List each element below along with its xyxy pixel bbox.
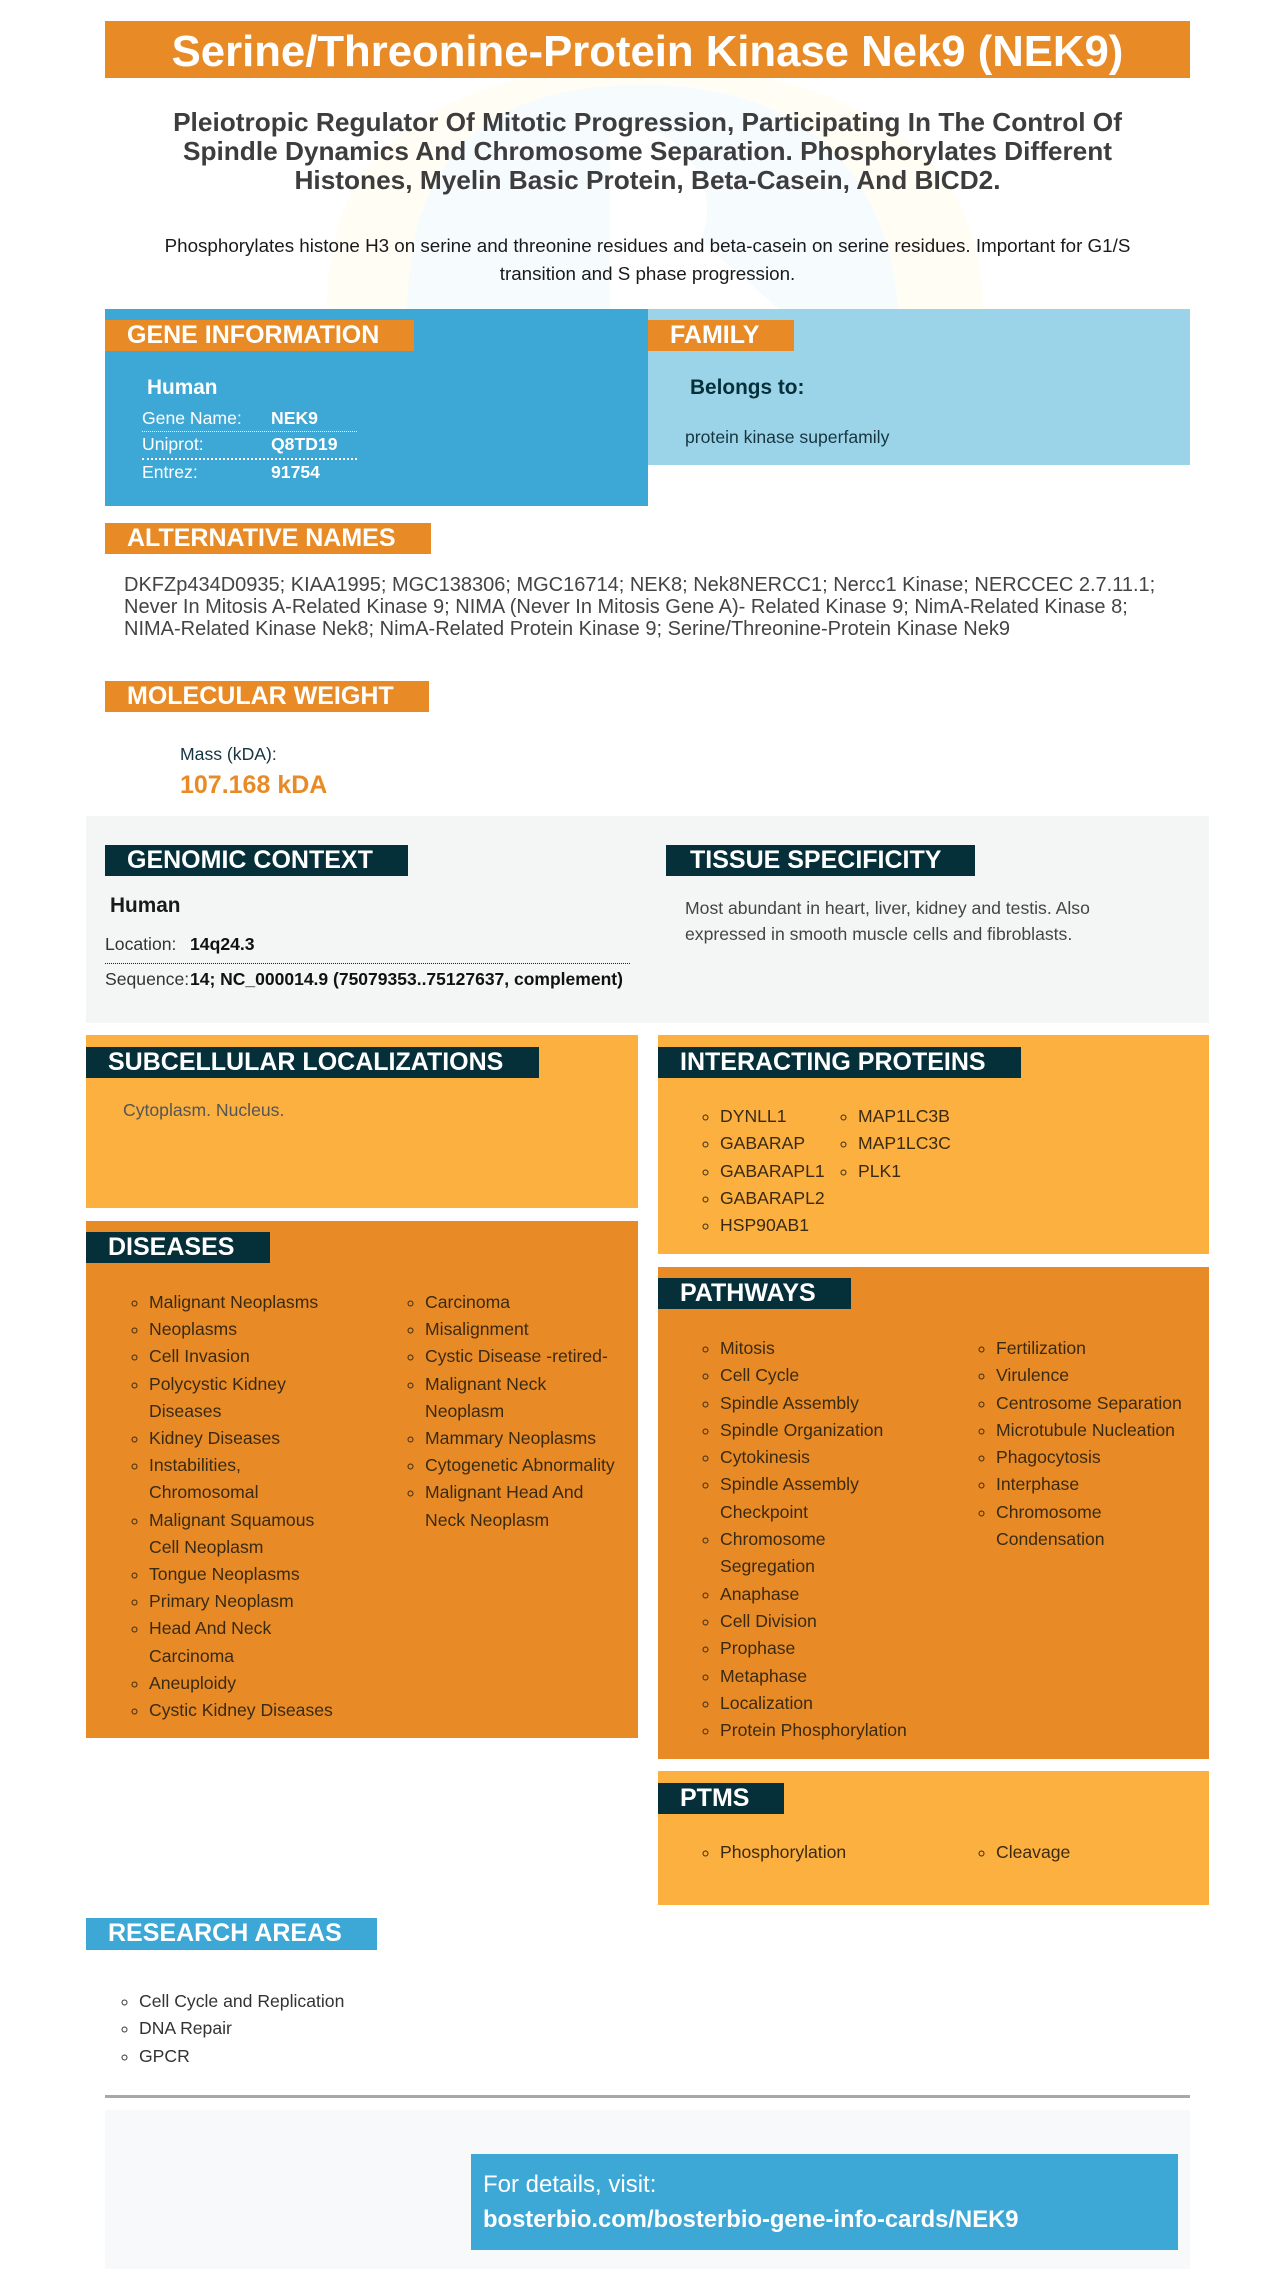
subtitle: Spindle Dynamics And Chromosome Separation. Phosphorylates Different xyxy=(183,136,1112,166)
gene name row xyxy=(142,406,357,432)
disease list column 1: Aneuploidy xyxy=(149,1673,236,1693)
heading: pathways xyxy=(658,1278,851,1309)
pathway list column 2: Centrosome Separation xyxy=(996,1393,1182,1413)
protein list column 1 xyxy=(702,1106,825,1235)
pathway list column 1: Spindle Assembly xyxy=(720,1474,859,1494)
pathway list column 1: Localization xyxy=(720,1693,813,1713)
panel: ptms xyxy=(658,1771,1209,1905)
alternative names text: DKFZp434D0935; KIAA1995; MGC138306; MGC16714; NEK8; Nek8NERCC1; Nercc1 Kinase; NERCCEC 2.7.11.1; xyxy=(124,574,1155,596)
belongs to label: Belongs to: xyxy=(690,376,804,399)
protein list column 1: GABARAPL2 xyxy=(720,1188,825,1208)
heading: pathways: PATHWAYS xyxy=(680,1279,816,1307)
disease list column 2: Cystic Disease -retired- xyxy=(425,1346,608,1366)
subtitle: Histones, Myelin Basic Protein, Beta-Casein, And BICD2. xyxy=(294,165,1001,195)
protein list column 1: GABARAP xyxy=(720,1133,805,1153)
heading: genomic context: GENOMIC CONTEXT xyxy=(127,846,373,874)
pathway list column 1 xyxy=(702,1338,907,1740)
alternative names text xyxy=(124,574,1155,640)
pathway list column 2: Interphase xyxy=(996,1474,1079,1494)
pathway list column 2: Fertilization xyxy=(996,1338,1086,1358)
protein list column 1: HSP90AB1 xyxy=(720,1215,809,1235)
heading: diseases xyxy=(86,1232,270,1263)
protein list column 2: MAP1LC3C xyxy=(858,1133,951,1153)
heading: tissue specificity: TISSUE SPECIFICITY xyxy=(690,846,941,874)
research areas list: Cell Cycle and Replication xyxy=(139,1991,344,2011)
disease list column 1: Cell Neoplasm xyxy=(149,1537,263,1557)
disease list column 2: Cytogenetic Abnormality xyxy=(425,1455,615,1475)
disease list column 1: Cell Invasion xyxy=(149,1346,250,1366)
pathway list column 1: Chromosome xyxy=(720,1529,826,1549)
subtitle xyxy=(173,107,1122,195)
disease list column 2: Malignant Head And xyxy=(425,1482,583,1502)
heading: interacting proteins: INTERACTING PROTEINS xyxy=(680,1048,986,1076)
research areas list xyxy=(122,1991,344,2066)
pathway list column 2: Virulence xyxy=(996,1365,1069,1385)
title: Serine/Threonine-Protein Kinase Nek9 (NEK9) xyxy=(172,27,1123,76)
pathway list column 1: Metaphase xyxy=(720,1666,807,1686)
gene name row: NEK9 xyxy=(271,408,318,428)
footer panel xyxy=(105,2110,1190,2269)
entrez row xyxy=(142,462,320,482)
disease list column 2: Neck Neoplasm xyxy=(425,1510,549,1530)
alternative names text: NIMA-Related Kinase Nek8; NimA-Related Protein Kinase 9; Serine/Threonine-Protein Kinase Nek9 xyxy=(124,618,1010,640)
tissue specificity text: expressed in smooth muscle cells and fibroblasts. xyxy=(685,924,1072,944)
panel: family xyxy=(648,309,1190,465)
disease list column 1: Carcinoma xyxy=(149,1646,234,1666)
protein list column 2: MAP1LC3B xyxy=(858,1106,950,1126)
pathway list column 1: Checkpoint xyxy=(720,1502,808,1522)
heading: alternative names: ALTERNATIVE NAMES xyxy=(127,524,396,552)
pathway list column 2: Condensation xyxy=(996,1529,1105,1549)
pathway list column 1: Cell Cycle xyxy=(720,1365,799,1385)
gene name row: Gene Name: xyxy=(142,408,242,428)
panel: subcellular localizations xyxy=(86,1035,638,1208)
pathway list column 2: Microtubule Nucleation xyxy=(996,1420,1175,1440)
heading: family: FAMILY xyxy=(670,321,759,349)
heading: gene information: GENE INFORMATION xyxy=(127,321,379,349)
watermark logo xyxy=(327,78,983,309)
panel: gene information xyxy=(105,309,648,506)
heading: ptms: PTMS xyxy=(680,1784,749,1812)
location row: 14q24.3 xyxy=(190,934,255,954)
disease list column 2: Neoplasm xyxy=(425,1401,504,1421)
heading: diseases: DISEASES xyxy=(108,1233,234,1261)
disease list column 1: Malignant Squamous xyxy=(149,1510,314,1530)
description: transition and S phase progression. xyxy=(500,263,795,284)
species label: Human xyxy=(110,894,180,917)
location row: Location: xyxy=(105,934,176,954)
research areas list: GPCR xyxy=(139,2046,190,2066)
ptm list column 1: Phosphorylation xyxy=(720,1842,846,1862)
panel: diseases xyxy=(86,1221,638,1738)
disease list column 1: Chromosomal xyxy=(149,1482,259,1502)
species label: Human xyxy=(147,376,217,399)
uniprot row xyxy=(142,432,357,460)
disease list column 1: Polycystic Kidney xyxy=(149,1374,286,1394)
sequence row: 14; NC_000014.9 (75079353..75127637, complement) xyxy=(190,969,623,989)
heading: ptms xyxy=(658,1783,784,1814)
tissue specificity text: Most abundant in heart, liver, kidney and testis. Also xyxy=(685,898,1090,918)
disease list column 2: Mammary Neoplasms xyxy=(425,1428,596,1448)
protein list column 2 xyxy=(840,1106,951,1181)
pathway list column 1: Segregation xyxy=(720,1556,815,1576)
protein list column 1: GABARAPL1 xyxy=(720,1161,825,1181)
description xyxy=(165,235,1130,284)
pathway list column 1: Spindle Organization xyxy=(720,1420,883,1440)
research areas list: DNA Repair xyxy=(139,2018,232,2038)
pathway list column 1: Cell Division xyxy=(720,1611,817,1631)
panel: genomic context and tissue specificity xyxy=(86,816,1209,1023)
pathway list column 1: Prophase xyxy=(720,1638,795,1658)
pathway list column 2: Chromosome xyxy=(996,1502,1102,1522)
callout url: bosterbio.com/bosterbio-gene-info-cards/NEK9 xyxy=(483,2206,1018,2233)
uniprot row: Q8TD19 xyxy=(271,434,338,454)
disease list column 2: Misalignment xyxy=(425,1319,529,1339)
disease list column 1: Neoplasms xyxy=(149,1319,237,1339)
ptm list column 2: Cleavage xyxy=(996,1842,1070,1862)
disease list column 2: Carcinoma xyxy=(425,1292,510,1312)
disease list column 1 xyxy=(132,1292,333,1720)
description: Phosphorylates histone H3 on serine and threonine residues and beta-casein on serine residues. Important for G1/S xyxy=(165,235,1130,256)
family value: protein kinase superfamily xyxy=(685,427,889,447)
entrez row: Entrez: xyxy=(142,462,198,482)
disease list column 2 xyxy=(408,1292,615,1530)
disease list column 1: Kidney Diseases xyxy=(149,1428,280,1448)
alternative names text: Never In Mitosis A-Related Kinase 9; NIMA (Never In Mitosis Gene A)- Related Kinase 9; NimA-Related Kinase 8; xyxy=(124,596,1128,618)
mass label: Mass (kDA): xyxy=(180,744,277,764)
sequence row: Sequence: xyxy=(105,969,189,989)
uniprot row: Uniprot: xyxy=(142,434,204,454)
callout: details link xyxy=(471,2154,1178,2250)
subtitle: Pleiotropic Regulator Of Mitotic Progression, Participating In The Control Of xyxy=(173,107,1122,137)
disease list column 1: Malignant Neoplasms xyxy=(149,1292,318,1312)
callout label: For details, visit: xyxy=(483,2171,656,2198)
tissue specificity text xyxy=(685,898,1090,944)
pathway list column 1: Protein Phosphorylation xyxy=(720,1720,907,1740)
pathway list column 2: Phagocytosis xyxy=(996,1447,1101,1467)
disease list column 1: Cystic Kidney Diseases xyxy=(149,1700,333,1720)
heading: family xyxy=(648,320,794,351)
protein list column 1: DYNLL1 xyxy=(720,1106,787,1126)
localization text: Cytoplasm. Nucleus. xyxy=(123,1100,284,1120)
disease list column 1: Head And Neck xyxy=(149,1618,271,1638)
disease list column 1: Primary Neoplasm xyxy=(149,1591,294,1611)
disease list column 1: Instabilities, xyxy=(149,1455,241,1475)
panel: interacting proteins xyxy=(658,1035,1209,1254)
pathway list column 2 xyxy=(978,1338,1182,1549)
mass value: 107.168 kDA xyxy=(180,771,327,799)
pathway list column 1: Mitosis xyxy=(720,1338,775,1358)
divider xyxy=(105,2095,1190,2098)
pathway list column 1: Spindle Assembly xyxy=(720,1393,859,1413)
heading: subcellular localizations: SUBCELLULAR LOCALIZATIONS xyxy=(108,1048,503,1076)
panel: pathways xyxy=(658,1267,1209,1759)
entrez row: 91754 xyxy=(271,462,320,482)
pathway list column 1: Cytokinesis xyxy=(720,1447,810,1467)
location row xyxy=(105,932,630,964)
heading: research areas: RESEARCH AREAS xyxy=(108,1919,342,1947)
protein list column 2: PLK1 xyxy=(858,1161,901,1181)
pathway list column 1: Anaphase xyxy=(720,1584,799,1604)
disease list column 1: Diseases xyxy=(149,1401,221,1421)
heading: molecular weight: MOLECULAR WEIGHT xyxy=(127,682,394,710)
disease list column 1: Tongue Neoplasms xyxy=(149,1564,300,1584)
disease list column 2: Malignant Neck xyxy=(425,1374,546,1394)
